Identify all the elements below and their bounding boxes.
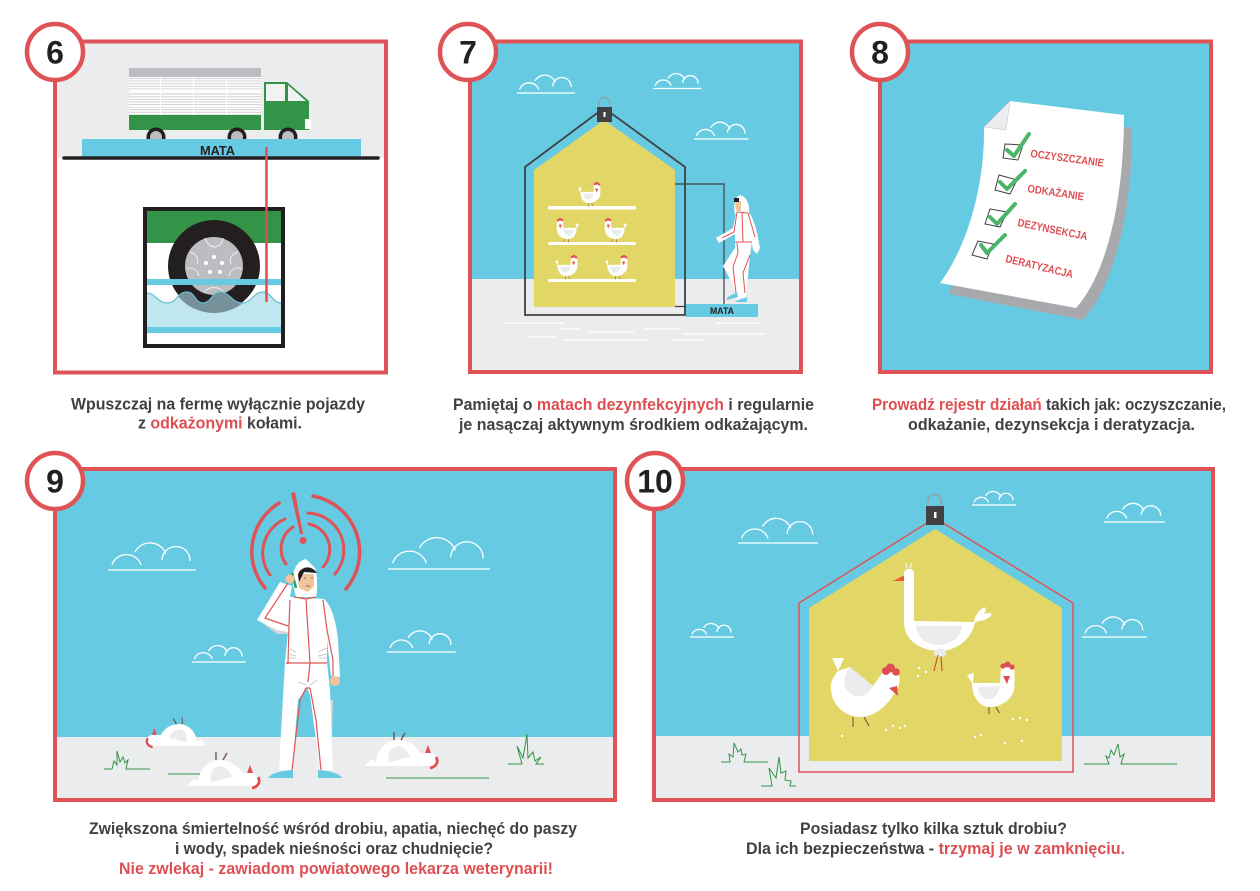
number badge 10: 10: [637, 464, 673, 500]
caption 8: odkażanie, dezynsekcja i deratyzacja.: [908, 416, 1195, 434]
panel 9 frame: [55, 469, 615, 800]
panel: step 9 worker alerting about dead birds: [55, 469, 615, 800]
icon: padlock: [597, 98, 612, 122]
paper fold: [984, 101, 1010, 130]
goose: [893, 563, 992, 671]
paper sheet: [940, 101, 1124, 308]
panel 7 frame: [470, 42, 801, 372]
caption 9: [89, 820, 578, 878]
alert signal arcs and exclamation mark: [252, 492, 360, 589]
mat with label: MATA: [200, 143, 236, 158]
icon: truck: [129, 68, 311, 146]
house outline: [525, 108, 685, 315]
panel 10 frame: [654, 469, 1213, 800]
house fill: [534, 120, 675, 307]
number badge 7: [440, 24, 496, 80]
checklist item 3: DEZYNSEKCJA: [1016, 217, 1088, 243]
number badge 10: [627, 453, 683, 509]
checklist item 4: DERATYZACJA: [1004, 253, 1074, 281]
caption 7: je nasączaj aktywnym środkiem odkażającym.: [458, 416, 808, 434]
hen right: [967, 662, 1015, 714]
grass: [104, 734, 544, 778]
caption 8: [872, 396, 1226, 434]
clouds: [690, 491, 1165, 637]
house fill: [809, 529, 1062, 761]
grass: [721, 743, 1177, 786]
checklist item 3: [985, 204, 1088, 243]
panel: step 8 checklist: [880, 42, 1211, 372]
floor marks: [504, 323, 766, 340]
checklist item 1: OCZYSZCZANIE: [1030, 148, 1105, 170]
chickens on shelves: [555, 182, 627, 280]
figure: worker on the phone: [257, 559, 342, 778]
panel 9 background: [55, 469, 615, 800]
caption 9: Zwiększona śmiertelność wśród drobiu, apatia, niechęć do paszy: [89, 820, 578, 838]
checklist item 1: [1003, 134, 1105, 170]
caption 10: [746, 820, 1125, 858]
dead birds: [147, 718, 437, 788]
number badge 9: 9: [46, 464, 64, 500]
caption 9: i wody, spadek nieśności oraz chudnięcie?: [175, 840, 493, 858]
caption 10: Posiadasz tylko kilka sztuk drobiu?: [800, 820, 1067, 838]
caption 6: Wpuszczaj na fermę wyłącznie pojazdy: [71, 396, 366, 414]
hen left: [831, 658, 900, 727]
mat with label: MATA: [710, 306, 734, 317]
paper shadow: [949, 127, 1132, 320]
panel: step 7 locked poultry house: [470, 42, 801, 372]
mat with label: [82, 139, 361, 158]
number badge 6: [27, 24, 83, 80]
clouds: [517, 74, 749, 139]
number badge 7: 7: [459, 34, 477, 70]
caption 6: [71, 396, 366, 432]
panel 7 background: [470, 42, 801, 372]
feed grains: [841, 667, 1028, 744]
house outline: [799, 518, 1073, 772]
panel 8 background: [880, 42, 1211, 372]
caption 7: [453, 396, 814, 434]
caption 8: Prowadź rejestr działań takich jak: oczyszczanie,: [872, 396, 1226, 414]
figure: worker in protective suit: [716, 195, 760, 302]
number badge 8: 8: [871, 34, 889, 70]
ground line: [64, 156, 378, 160]
panel: step 10 birds kept indoors: [654, 469, 1213, 801]
door line: [675, 184, 724, 306]
number badge 8: [852, 24, 908, 80]
caption 9: Nie zwlekaj - zawiadom powiatowego lekarza weterynarii!: [119, 860, 553, 878]
panel 8 frame: [880, 42, 1211, 372]
callout line: [265, 147, 268, 302]
mat with label: [686, 304, 758, 317]
inset: wheel in disinfectant: [145, 209, 283, 346]
caption 6: z odkażonymi kołami.: [138, 414, 302, 432]
checklist item 2: ODKAŻANIE: [1027, 182, 1085, 203]
icon: padlock: [926, 495, 944, 525]
panel 6 background: [55, 42, 386, 372]
shelves: [548, 206, 636, 282]
checklist item 4: [972, 235, 1074, 281]
caption 10: Dla ich bezpieczeństwa - trzymaj je w zamknięciu.: [746, 840, 1125, 858]
caption 7: Pamiętaj o matach dezynfekcyjnych i regularnie: [453, 396, 814, 414]
number badge 6: 6: [46, 34, 64, 70]
panel 6 frame: [55, 42, 386, 372]
panel: step 6 truck on disinfection mat: [55, 42, 386, 372]
number badge 9: [27, 453, 83, 509]
clouds: [108, 538, 490, 662]
panel 10 background: [654, 469, 1213, 801]
checklist item 2: [995, 171, 1085, 203]
